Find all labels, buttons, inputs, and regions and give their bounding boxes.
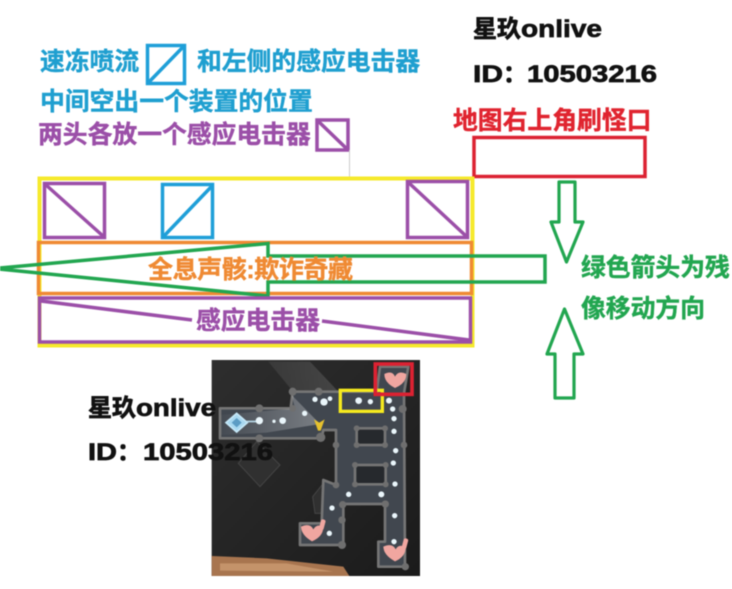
label: map top right spawn: 地图右上角刷怪口 bbox=[453, 107, 651, 135]
sensor strip label: 感应电击器 bbox=[196, 306, 320, 335]
watermark: bottom player ID: ： bbox=[117, 439, 141, 466]
watermark: top right player ID bbox=[473, 16, 657, 88]
watermark: bottom player ID bbox=[88, 395, 273, 466]
icon: blue freeze jet square bbox=[148, 46, 184, 84]
vision light on floor bbox=[220, 395, 320, 435]
heading: freeze jet instruction: 中间空出一个装置的位置 bbox=[40, 87, 313, 116]
watermark: top right player ID: ： bbox=[503, 61, 527, 88]
panel: placement diagram bbox=[0, 178, 545, 346]
spawn markers bbox=[301, 372, 409, 561]
legend: green arrow meaning: 像移动方向 bbox=[581, 294, 705, 323]
legend: green arrow meaning: 绿色箭头为残 bbox=[581, 253, 730, 282]
orange boss box bbox=[38, 242, 472, 294]
heading: freeze jet instruction: 和左侧的感应电击器 bbox=[197, 47, 420, 76]
icon: purple sensor square bbox=[317, 120, 348, 150]
stair hatch bbox=[238, 442, 323, 513]
purple sensor strip bbox=[40, 298, 470, 342]
yellow outer frame bbox=[40, 178, 472, 346]
watermark: top right player ID: ID bbox=[473, 61, 503, 88]
text: purple placement instruction: 两头各放一个感应电击器 bbox=[38, 120, 311, 149]
watermark: bottom player ID: ID bbox=[88, 439, 117, 466]
watermark: top right player ID: onlive bbox=[521, 16, 602, 43]
icon: right purple sensor bbox=[408, 182, 468, 238]
wall nodes bbox=[255, 388, 409, 570]
watermark: bottom player ID: 星玖 bbox=[88, 395, 136, 422]
legend: green arrow meaning bbox=[581, 253, 730, 323]
arrow: green down bbox=[551, 182, 583, 262]
icon: left purple sensor bbox=[44, 184, 104, 238]
floor plan bbox=[220, 367, 408, 567]
map background bbox=[212, 360, 420, 576]
inner rooms bbox=[355, 428, 386, 484]
ground strip at bottom bbox=[212, 556, 349, 576]
watermark: bottom player ID: onlive bbox=[136, 395, 216, 422]
monster dots bbox=[256, 396, 398, 544]
yellow highlight box bbox=[340, 390, 382, 411]
panel: game minimap bbox=[212, 360, 420, 576]
watermark: top right player ID: 10503216 bbox=[527, 61, 657, 88]
player arrow bbox=[314, 419, 325, 431]
watermark: bottom player ID: 10503216 bbox=[143, 439, 273, 466]
heading: freeze jet instruction: 速冻喷流 bbox=[40, 48, 139, 76]
spawn zone red box bbox=[474, 138, 645, 176]
watermark: top right player ID: 星玖 bbox=[473, 16, 521, 43]
icon: blue freeze jet bbox=[162, 184, 212, 238]
boss name: 全息声骸:欺诈奇藏 bbox=[148, 256, 353, 284]
red highlight box bbox=[375, 364, 412, 394]
green movement arrow bbox=[0, 244, 545, 296]
vision cone bbox=[220, 362, 340, 435]
arrow: green up bbox=[547, 309, 583, 398]
start crystal bbox=[226, 413, 257, 432]
heading: freeze jet instruction bbox=[40, 47, 420, 116]
